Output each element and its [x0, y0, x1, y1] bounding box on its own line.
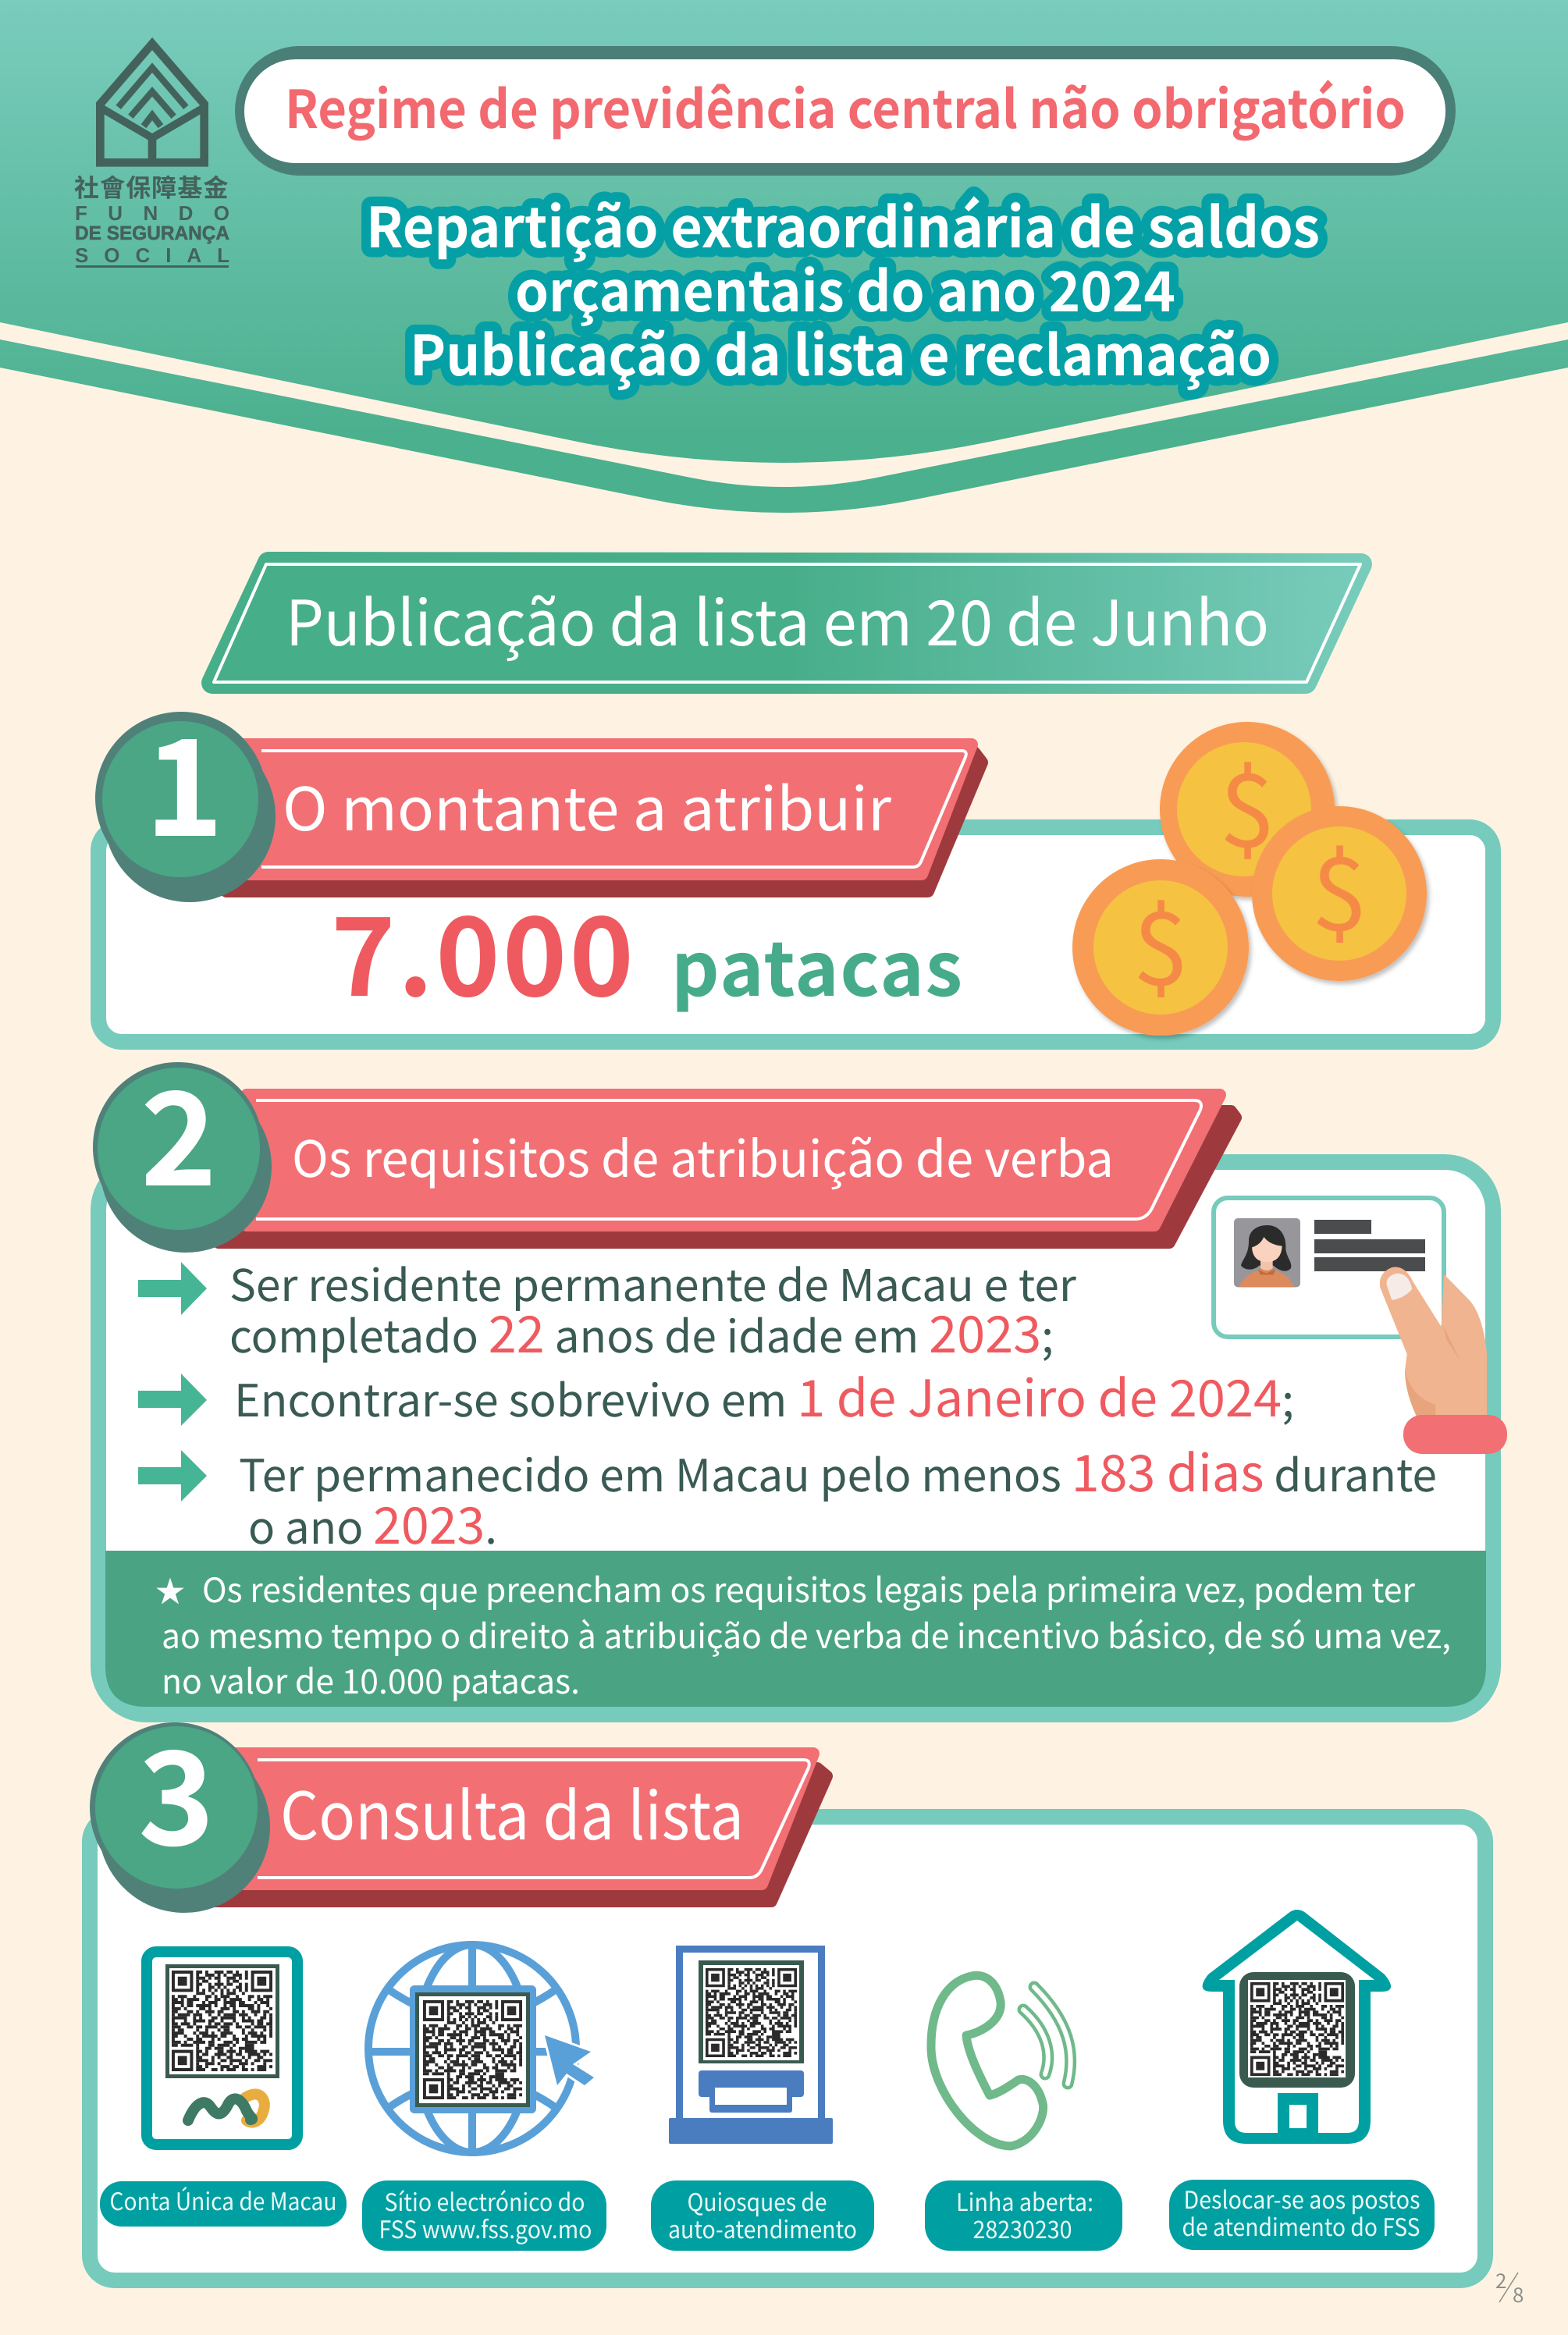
requirement 2: Encontrar-se sobrevivo em 1 de Janeiro de 2024; — [234, 1358, 1294, 1431]
logo: Fundo de Segurança Social — [74, 44, 229, 268]
label pill: kiosks: auto-atendimento — [668, 2210, 857, 2245]
cursor — [545, 2035, 594, 2085]
number badge 1: 1 — [144, 680, 224, 875]
requirement 3 — [138, 1433, 1437, 1558]
door — [1278, 2093, 1318, 2134]
icon: coins — [1072, 722, 1427, 1036]
title pill: Regime de previdência central não obrigatório — [285, 68, 1406, 144]
icon: globe with QR — [368, 1945, 594, 2152]
note text: no valor de 10.000 patacas. — [162, 1655, 580, 1704]
icon: coins: $ — [1311, 813, 1367, 960]
ribbon 3 heading — [211, 1754, 827, 1901]
label pill: kiosks: Quiosques de — [687, 2183, 827, 2218]
icon: house with QR — [1203, 1910, 1391, 2144]
label pill: kiosks — [651, 2180, 874, 2251]
main heading: Repartição extraordinária de saldos — [366, 184, 1320, 264]
icon: coins: $ — [1219, 730, 1275, 876]
logo: Fundo de Segurança Social: FUNDO — [75, 201, 229, 225]
number badge 2 — [93, 1035, 272, 1253]
label pill: service counters: Deslocar-se aos postos — [1183, 2180, 1420, 2216]
label pill: website: Sítio electrónico do — [384, 2183, 585, 2218]
icon: phone with QR — [147, 1952, 297, 2145]
label pill: service counters — [1169, 2180, 1435, 2250]
header band — [0, 0, 1568, 513]
note text: ★ — [155, 1568, 185, 1611]
note band — [105, 1551, 1486, 1707]
page number: 2 — [1495, 2266, 1506, 2294]
label pill: service counters: de atendimento do FSS — [1182, 2208, 1420, 2243]
logo: Fundo de Segurança Social: 社會保障基金 — [74, 169, 229, 204]
label pill: hotline: Linha aberta: — [956, 2183, 1093, 2218]
icon: coins: $ — [1132, 868, 1189, 1015]
main heading: orçamentais do ano 2024 — [515, 248, 1175, 328]
printer slot — [699, 2070, 804, 2097]
MO logo — [188, 2094, 265, 2123]
arrow — [138, 1262, 207, 1315]
label pill: hotline — [925, 2180, 1122, 2251]
amount unit: patacas — [671, 909, 962, 1018]
ribbon 2 heading — [219, 1095, 1236, 1242]
logo: Fundo de Segurança Social: SOCIAL — [75, 243, 229, 267]
page number — [1495, 2266, 1524, 2308]
requirement 3: o ano 2023. — [248, 1485, 497, 1558]
banner: publication date — [212, 563, 1361, 683]
hand — [1380, 1267, 1487, 1416]
ribbon 1 heading: O montante a atribuir — [283, 762, 892, 848]
label pill: Conta Única: Conta Única de Macau — [109, 2182, 337, 2217]
arrow — [138, 1374, 207, 1426]
requirement 1: completado 22 anos de idade em 2023; — [229, 1294, 1054, 1367]
main heading: Publicação da lista e reclamação — [410, 312, 1271, 392]
icon: ID card and hand — [1214, 1198, 1507, 1454]
note text: ao mesmo tempo o direito à atribuição de verba de incentivo básico, de só uma vez, — [162, 1610, 1451, 1658]
logo: Fundo de Segurança Social: DE SEGURANÇA — [75, 222, 229, 244]
amount value: 7.000 — [331, 870, 634, 1028]
note text — [155, 1564, 1451, 1704]
ribbon 1 heading — [226, 745, 982, 891]
ribbon 2 heading: Os requisitos de atribuição de verba — [292, 1120, 1114, 1192]
panel 2: requirements — [98, 1162, 1493, 1715]
title pill — [235, 46, 1456, 176]
card photo — [1234, 1218, 1300, 1287]
number badge 2: 2 — [140, 1035, 217, 1223]
page number: 8 — [1513, 2280, 1524, 2308]
number badge 3 — [90, 1694, 270, 1913]
cuff — [1403, 1415, 1507, 1454]
card text bars — [1314, 1220, 1425, 1271]
icon: telephone — [931, 1975, 1071, 2146]
arrow — [138, 1450, 207, 1502]
ribbon 3 heading: Consulta da lista — [280, 1765, 744, 1859]
icon: kiosk with QR — [669, 1949, 833, 2144]
banner: publication date: Publicação da lista em 20 de Junho — [286, 574, 1269, 664]
number badge 1 — [95, 680, 276, 902]
label pill: website: FSS www.fss.gov.mo — [379, 2210, 592, 2245]
label pill: website — [362, 2180, 606, 2251]
requirement 1: Ser residente permanente de Macau e ter — [229, 1251, 1076, 1314]
main heading — [366, 184, 1320, 392]
requirement 1 — [138, 1251, 1076, 1367]
note text: Os residentes que preencham os requisitos legais pela primeira vez, podem ter — [202, 1564, 1415, 1612]
panel 3: consult the list — [90, 1817, 1485, 2280]
panel 1: amount — [98, 827, 1493, 1042]
requirement 3: Ter permanecido em Macau pelo menos 183 dias durante — [239, 1433, 1437, 1506]
number badge 3: 3 — [138, 1694, 215, 1882]
label pill: hotline: 28230230 — [972, 2210, 1072, 2245]
